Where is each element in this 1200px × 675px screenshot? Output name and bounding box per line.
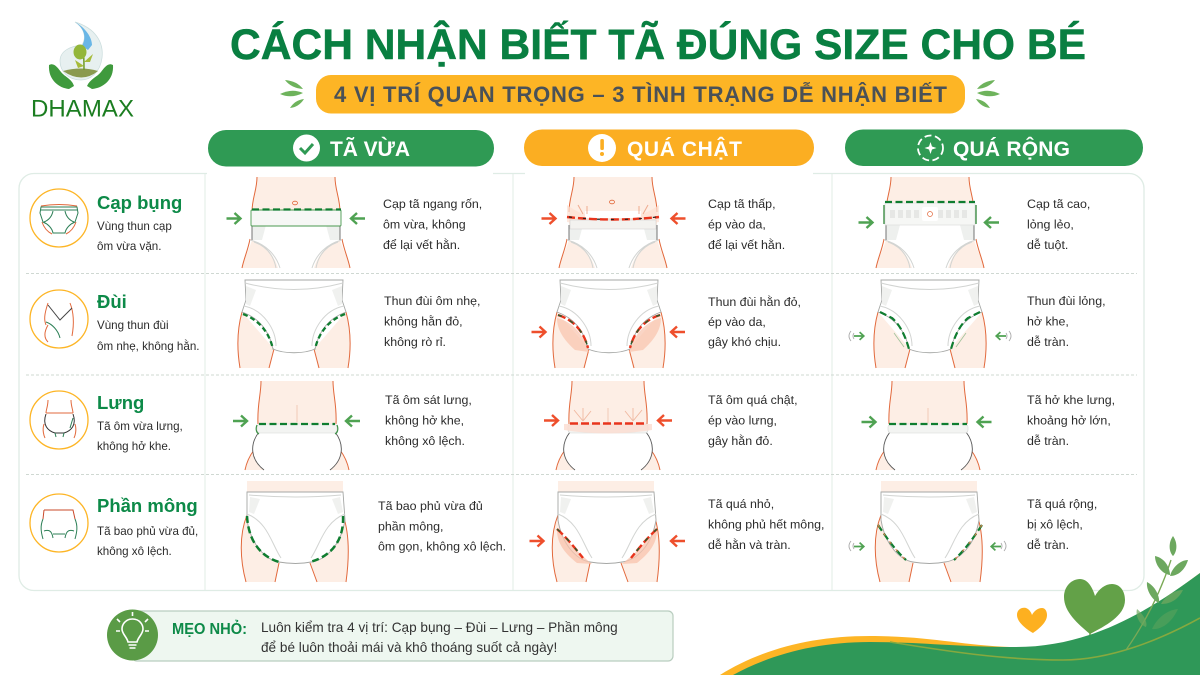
arrows: chật, đùi xyxy=(532,326,685,338)
figure: chật, cạp bụng xyxy=(559,177,667,268)
arrows: rộng, đùi xyxy=(849,331,1011,341)
text: vừa, phần mông: ôm gọn, không xô lệch. xyxy=(378,540,506,554)
text: rộng, cạp bụng: Cạp tã cao, xyxy=(1027,197,1090,211)
text: vừa, cạp bụng: để lại vết hằn. xyxy=(383,237,460,252)
row label: cạp bụng: Vùng thun cạp xyxy=(97,220,172,233)
text: vừa, đùi: Thun đùi ôm nhẹ, xyxy=(384,294,480,308)
bottom wave xyxy=(720,573,1200,675)
figure: rộng, đùi xyxy=(874,280,986,368)
column header: quá rộng: QUÁ RỘNG xyxy=(953,137,1070,161)
arrows: rộng, phần mông xyxy=(849,541,1006,551)
row label: đùi xyxy=(30,290,200,353)
icon: light bulb xyxy=(107,610,158,660)
figure: rộng, cạp bụng xyxy=(876,177,984,268)
row label: phần mông: Tã bao phủ vừa đủ, xyxy=(97,525,198,538)
text: rộng, lưng: Tã hở khe lưng, xyxy=(1027,393,1115,407)
text: chật, lưng: Tã ôm quá chật, xyxy=(708,393,798,407)
text: vừa, phần mông: phần mông, xyxy=(378,520,443,534)
icon: yellow heart xyxy=(1017,608,1047,633)
column header: tã vừa: TÃ VỪA xyxy=(330,137,410,161)
text: rộng, lưng: dễ tràn. xyxy=(1027,433,1069,448)
text: chật, cạp bụng xyxy=(708,197,785,252)
tip box: MẸO NHỎ: xyxy=(172,620,247,638)
icon: thigh xyxy=(30,290,88,348)
text: chật, cạp bụng: ép vào da, xyxy=(708,218,766,232)
text: rộng, cạp bụng xyxy=(1027,197,1090,252)
column header: tã vừa xyxy=(208,130,494,166)
text: vừa, phần mông xyxy=(378,499,506,554)
arrows: vừa, lưng xyxy=(233,416,360,426)
row label: lưng: Tã ôm vừa lưng, xyxy=(97,420,183,433)
arrows: chật, lưng xyxy=(544,415,672,426)
text: vừa, lưng: không hở khe, xyxy=(385,414,464,428)
text: chật, cạp bụng: để lại vết hằn. xyxy=(708,237,785,252)
column header: quá chật xyxy=(524,130,814,166)
panel: comparison table xyxy=(19,174,1144,590)
row label: phần mông xyxy=(30,494,198,558)
text: vừa, cạp bụng: Cạp tã ngang rốn, xyxy=(383,197,482,211)
text: rộng, lưng: khoảng hở lớn, xyxy=(1027,414,1111,428)
text: chật, phần mông: không phủ hết mông, xyxy=(708,518,824,532)
text: vừa, phần mông: Tã bao phủ vừa đủ xyxy=(378,499,483,513)
figure: chật, đùi xyxy=(553,280,665,368)
row label: đùi: Đùi xyxy=(97,291,127,312)
tip box xyxy=(107,610,673,661)
logo wordmark: DHAMAX xyxy=(31,96,134,122)
text: rộng, đùi: dễ tràn. xyxy=(1027,334,1069,349)
icon: leaf sprig xyxy=(1126,536,1188,650)
tip box: để bé luôn thoải mái và khô thoáng suốt cả ngày! xyxy=(261,640,557,655)
text: chật, đùi xyxy=(708,294,801,349)
text: rộng, lưng xyxy=(1027,393,1115,448)
text: vừa, lưng: không xô lệch. xyxy=(385,434,465,448)
text: rộng, cạp bụng: dễ tuột. xyxy=(1027,237,1068,252)
column header: quá rộng xyxy=(845,130,1143,166)
subtitle pill: 4 VỊ TRÍ QUAN TRỌNG – 3 TÌNH TRẠNG DỄ NHẬN BIẾT xyxy=(334,81,948,107)
row label: lưng: Lưng xyxy=(97,392,144,413)
arrows: chật, cạp bụng xyxy=(542,213,686,224)
figure: vừa, lưng xyxy=(245,381,349,470)
icon: buttocks xyxy=(30,494,88,552)
row label: phần mông: Phần mông xyxy=(97,495,198,516)
row label: phần mông: không xô lệch. xyxy=(97,545,172,558)
arrows: chật, phần mông xyxy=(530,536,685,546)
tip box: Luôn kiểm tra 4 vị trí: Cạp bụng – Đùi – Lưng – Phần mông xyxy=(261,620,618,635)
text: chật, đùi: gây khó chịu. xyxy=(708,335,781,349)
row label: cạp bụng: ôm vừa vặn. xyxy=(97,240,161,253)
icon: back waist xyxy=(30,391,88,449)
column header: quá chật: QUÁ CHẬT xyxy=(627,137,742,161)
text: chật, đùi: Thun đùi hằn đỏ, xyxy=(708,294,801,309)
arrows: rộng, cạp bụng xyxy=(858,217,999,228)
figure: chật, lưng xyxy=(556,381,660,470)
text: vừa, lưng xyxy=(385,393,472,448)
figure: chật, phần mông xyxy=(552,481,659,582)
text: vừa, cạp bụng xyxy=(383,197,482,252)
icon: hands xyxy=(49,64,113,89)
text: chật, phần mông: dễ hằn và tràn. xyxy=(708,537,791,552)
text: chật, lưng: ép vào lưng, xyxy=(708,414,777,428)
icon: diaper xyxy=(30,189,88,247)
icon: green heart xyxy=(1064,579,1125,635)
text: chật, lưng xyxy=(708,393,798,448)
text: rộng, đùi: hở khe, xyxy=(1027,314,1069,328)
figure: vừa, cạp bụng xyxy=(242,177,350,268)
text: vừa, đùi: không hằn đỏ, xyxy=(384,314,463,328)
text: vừa, đùi: không rò rỉ. xyxy=(384,335,446,349)
figure: vừa, đùi xyxy=(238,280,350,368)
arrows: rộng, lưng xyxy=(862,416,992,428)
text: chật, phần mông: Tã quá nhỏ, xyxy=(708,497,774,511)
text: chật, phần mông xyxy=(708,497,824,552)
text: rộng, phần mông: bị xô lệch, xyxy=(1027,518,1083,532)
figure: rộng, lưng xyxy=(876,381,980,470)
text: chật, cạp bụng: Cạp tã thấp, xyxy=(708,197,776,211)
text: vừa, đùi xyxy=(384,294,480,349)
text: rộng, phần mông: Tã quá rộng, xyxy=(1027,497,1097,511)
subtitle pill xyxy=(316,75,965,114)
row label: lưng xyxy=(30,391,183,453)
text: rộng, phần mông xyxy=(1027,497,1097,552)
text: chật, đùi: ép vào da, xyxy=(708,315,766,329)
text: vừa, cạp bụng: ôm vừa, không xyxy=(383,218,466,232)
row label: đùi: ôm nhẹ, không hằn. xyxy=(97,340,200,353)
row label: đùi: Vùng thun đùi xyxy=(97,319,169,332)
icon: water drop with plant xyxy=(60,22,102,80)
text: rộng, đùi: Thun đùi lỏng, xyxy=(1027,294,1106,308)
row label: cạp bụng: Cạp bụng xyxy=(97,192,182,213)
figure: vừa, phần mông xyxy=(241,481,348,582)
icon: leaf burst right xyxy=(976,80,1000,108)
text: chật, lưng: gây hằn đỏ. xyxy=(708,433,773,448)
icon: leaf burst left xyxy=(280,80,304,108)
arrows: vừa, cạp bụng xyxy=(226,213,365,224)
row label: cạp bụng xyxy=(30,189,182,253)
title: CÁCH NHẬN BIẾT TÃ ĐÚNG SIZE CHO BÉ xyxy=(230,20,1086,69)
text: rộng, cạp bụng: lỏng lẻo, xyxy=(1027,218,1074,232)
figure: rộng, phần mông xyxy=(875,481,982,582)
text: rộng, phần mông: dễ tràn. xyxy=(1027,537,1069,552)
text: rộng, đùi xyxy=(1027,294,1106,349)
row label: lưng: không hở khe. xyxy=(97,440,171,453)
text: vừa, lưng: Tã ôm sát lưng, xyxy=(385,393,472,407)
logo: Dhamax xyxy=(31,22,134,122)
